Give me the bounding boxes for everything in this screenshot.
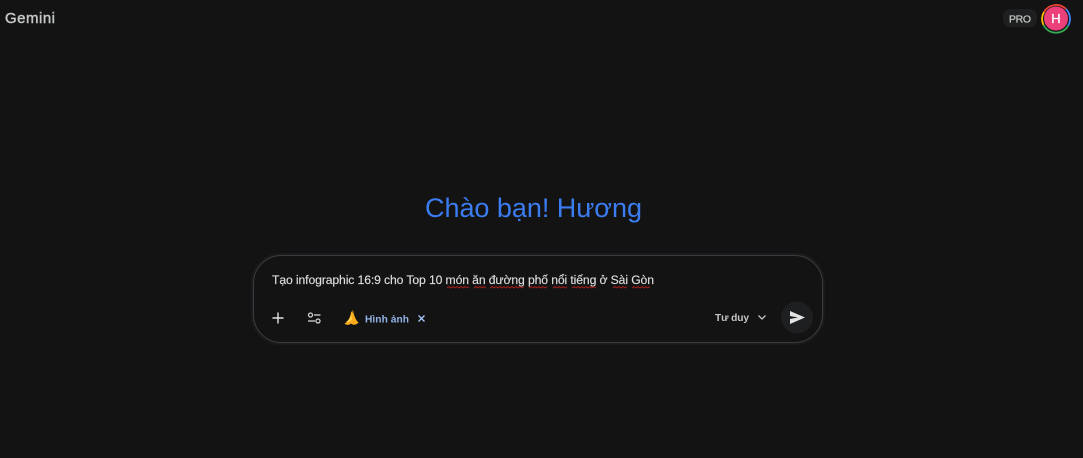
icon: banana	[344, 310, 358, 325]
chip label: image tool: Hình ảnh	[365, 314, 409, 326]
icon: tools sliders	[308, 313, 320, 323]
icon: close chip	[418, 316, 424, 322]
icon: chevron down	[758, 316, 766, 319]
prompt text: Tạo infographic 16:9 cho Top 10 món ăn đường phố nổi tiếng ở Sài Gòn	[272, 273, 654, 287]
panel: prompt input box	[254, 256, 822, 342]
icon: user avatar	[1042, 5, 1070, 33]
heading: greeting: Chào bạn! Hương	[425, 193, 642, 223]
badge: PRO: PRO	[1009, 14, 1031, 26]
logo: Gemini wordmark: Gemini	[5, 10, 55, 27]
spellcheck underlines	[447, 287, 650, 288]
icon: plus	[272, 312, 284, 324]
button: send	[781, 302, 813, 334]
icon: user avatar: H	[1051, 11, 1061, 26]
model selector label: Tư duy	[715, 313, 749, 324]
badge: PRO	[1003, 9, 1037, 27]
